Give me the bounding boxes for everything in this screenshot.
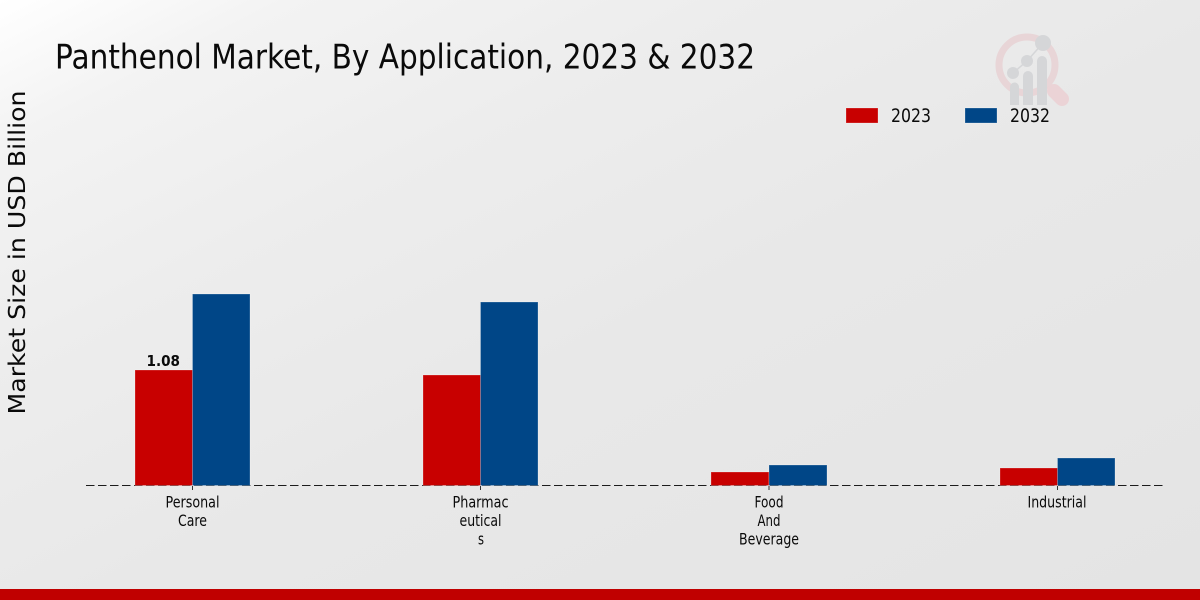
category label: Food And Beverage: And [758, 511, 780, 530]
bars: Personal Care [135, 294, 250, 486]
legend [846, 105, 1050, 127]
bars: Industrial [1000, 458, 1115, 486]
logo watermark [999, 35, 1062, 105]
category label: Food And Beverage: Beverage [739, 530, 799, 548]
category label: Pharmaceuticals: s [478, 530, 484, 548]
data label: 1.08: 1.08 [146, 352, 180, 370]
legend: 2023: 2023 [891, 105, 931, 127]
title: Panthenol Market, By Application, 2023 & 2032 [55, 38, 755, 76]
bar chart [86, 294, 1164, 548]
bars: Pharmaceuticals [423, 302, 538, 486]
category label: Pharmaceuticals: eutical [460, 511, 502, 530]
y-axis title: Market Size in USD Billion [3, 90, 31, 414]
category label: Personal Care: Personal [166, 492, 220, 512]
legend: 2032 [965, 105, 1050, 127]
legend: 2032: 2032 [1010, 105, 1050, 127]
legend: 2023 [846, 105, 931, 127]
category label: Pharmaceuticals: Pharmac [452, 492, 508, 512]
category label: Industrial: Industrial [1028, 492, 1086, 512]
footer bar [0, 589, 1200, 600]
bars: Food And Beverage [711, 465, 827, 486]
axis baseline [86, 484, 1164, 486]
category label: Personal Care: Care [178, 511, 207, 530]
category label: Food And Beverage: Food [754, 492, 784, 512]
